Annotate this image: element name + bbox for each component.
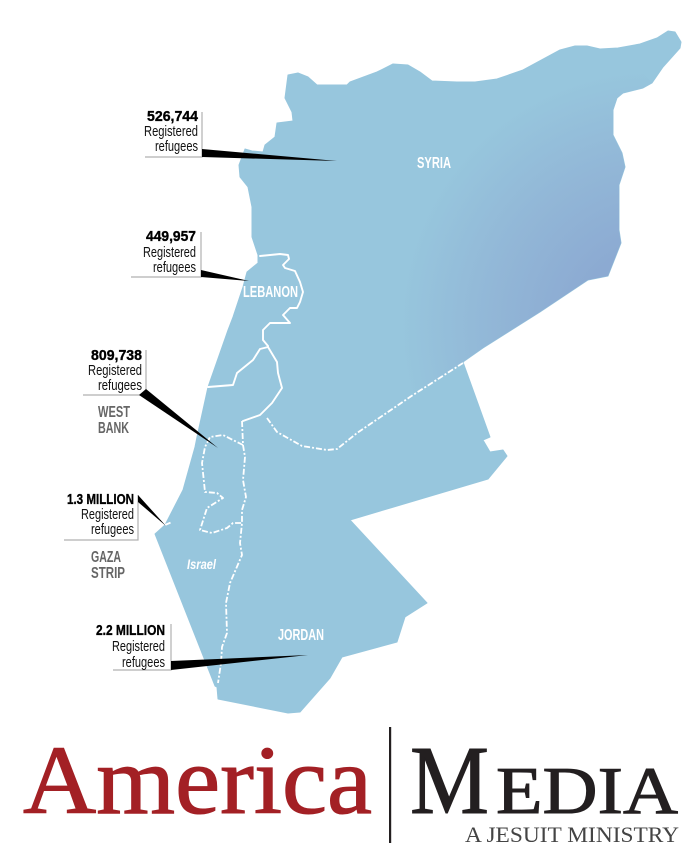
label: Gaza Strip xyxy=(91,549,125,582)
wordmark: Media: M xyxy=(410,727,489,834)
label: West Bank: WEST xyxy=(98,404,130,421)
callout: Jordan 2.2 million: 2.2 MILLION xyxy=(96,623,165,639)
label: Syria: SYRIA xyxy=(417,155,451,172)
label: Israel: Israel xyxy=(187,556,217,572)
label: Jordan: JORDAN xyxy=(278,627,324,644)
callout: West Bank 809,738 xyxy=(83,348,218,448)
wordmark: Media: EDIA xyxy=(496,754,678,828)
border: Gaza xyxy=(165,522,172,525)
Syria gradient shading xyxy=(340,70,652,417)
label: West Bank: BANK xyxy=(98,420,130,437)
logo divider xyxy=(389,727,391,843)
map: Levant region xyxy=(155,31,681,713)
callout: Lebanon 449,957: Registered xyxy=(143,245,196,261)
tagline: A JESUIT MINISTRY xyxy=(465,822,679,847)
label: Gaza Strip: GAZA xyxy=(91,549,121,566)
callout: Jordan 2.2 million: Registered xyxy=(112,639,165,655)
border: West Bank xyxy=(200,435,243,533)
callout: Lebanon 449,957: refugees xyxy=(153,260,196,276)
callout: Jordan 2.2 million xyxy=(96,623,308,671)
logo: America Media xyxy=(23,727,679,847)
callout: West Bank 809,738: Registered xyxy=(88,363,142,379)
border: Syria and Jordan xyxy=(267,363,463,450)
wordmark: America: America xyxy=(23,727,372,835)
callout: Syria 526,744: 526,744 xyxy=(147,109,198,125)
callout: West Bank 809,738: 809,738 xyxy=(91,348,142,364)
label: Gaza Strip: STRIP xyxy=(91,565,125,582)
callout: Jordan 2.2 million: refugees xyxy=(122,655,165,671)
callout: Lebanon 449,957: 449,957 xyxy=(146,229,196,245)
callout: Gaza Strip 1.3 million xyxy=(64,492,166,540)
border: West Bank and Jordan valley xyxy=(218,421,246,683)
label: West Bank xyxy=(98,404,130,437)
callout: Syria 526,744 xyxy=(144,109,337,161)
label: Lebanon: LEBANON xyxy=(243,284,298,301)
callout: Syria 526,744: refugees xyxy=(155,139,198,155)
border: Lebanon and Israel north xyxy=(208,254,303,421)
callout: Gaza Strip 1.3 million: 1.3 MILLION xyxy=(67,492,134,508)
callout: Lebanon 449,957 xyxy=(131,229,249,281)
land shape xyxy=(155,31,681,713)
callout: Gaza Strip 1.3 million: refugees xyxy=(91,522,134,538)
wordmark: Media xyxy=(410,727,678,834)
callout: Syria 526,744: Registered xyxy=(144,124,198,140)
callout: Gaza Strip 1.3 million: Registered xyxy=(81,507,134,523)
callout: West Bank 809,738: refugees xyxy=(98,378,142,394)
